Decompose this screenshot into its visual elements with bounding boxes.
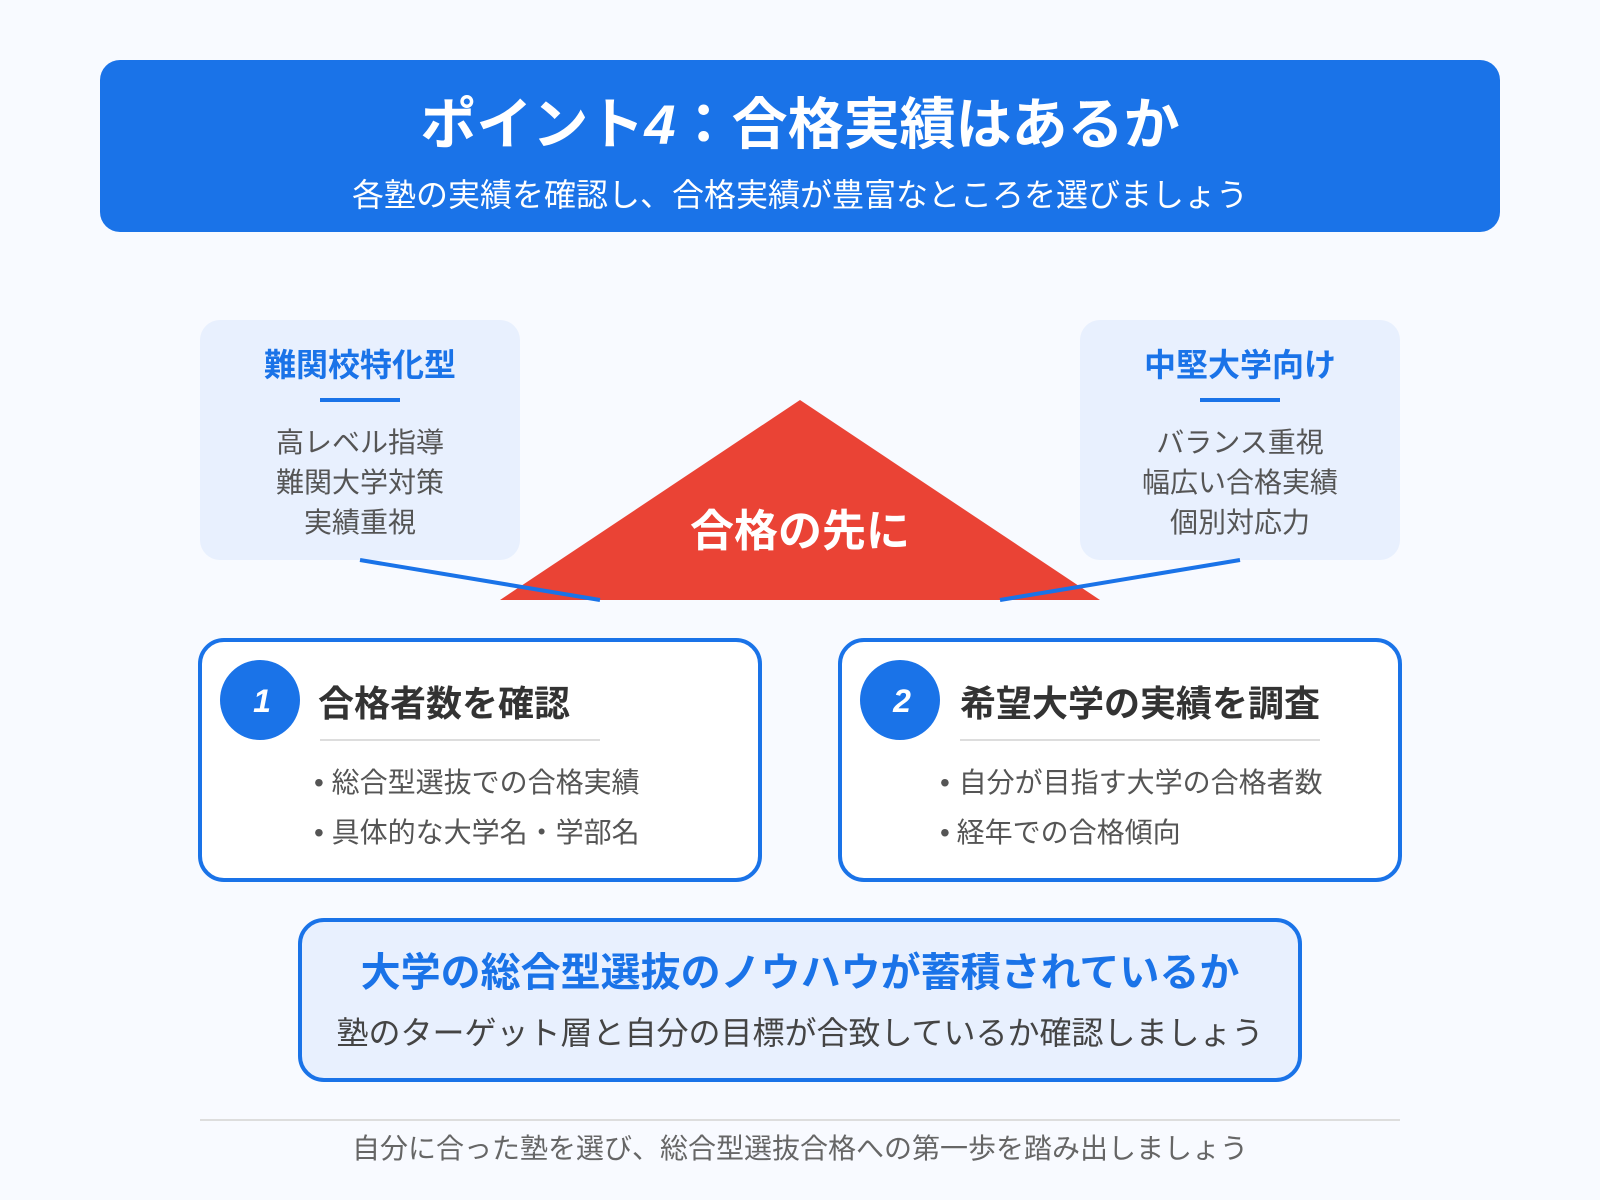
number badge 1 — [220, 660, 300, 740]
number badge 2: 2 — [892, 683, 911, 719]
panel text: 難関大学対策 — [276, 467, 444, 498]
panel text: 個別対応力 — [1170, 507, 1310, 538]
card 1 bullets: • 具体的な大学名・学部名 — [314, 817, 640, 848]
card 1 bullets — [314, 767, 640, 848]
callout text: 塾のターゲット層と自分の目標が合致しているか確認しましょう — [336, 1015, 1264, 1051]
triangle: beyond passing: 合格の先に — [690, 507, 910, 556]
card 2 heading: 希望大学の実績を調査 — [960, 683, 1320, 724]
panel heading: 中堅大学向け — [1144, 347, 1336, 383]
panel: mid-level universities — [1080, 320, 1400, 560]
subtitle: 各塾の実績を確認し、合格実績が豊富なところを選びましょう — [352, 177, 1248, 213]
connector left — [360, 560, 600, 600]
panel text: 幅広い合格実績 — [1142, 467, 1338, 498]
card 2 bullets — [940, 767, 1323, 848]
card 2 bullets: • 経年での合格傾向 — [940, 817, 1181, 848]
card 1 heading: 合格者数を確認 — [318, 683, 570, 724]
number badge 2 — [860, 660, 940, 740]
connector right — [1000, 560, 1240, 600]
card 2 bullets: • 自分が目指す大学の合格者数 — [940, 767, 1323, 798]
number badge 1: 1 — [253, 683, 271, 719]
title: ポイント4：合格実績はあるか — [420, 93, 1180, 156]
callout — [300, 920, 1300, 1080]
callout heading: 大学の総合型選抜のノウハウが蓄積されているか — [361, 951, 1239, 995]
card 2 — [840, 640, 1400, 880]
panel heading: 難関校特化型 — [264, 347, 456, 383]
triangle: beyond passing — [500, 400, 1100, 600]
card 1 bullets: • 総合型選抜での合格実績 — [314, 767, 640, 798]
panel text: 実績重視 — [304, 507, 416, 538]
footer text: 自分に合った塾を選び、総合型選抜合格への第一歩を踏み出しましょう — [352, 1133, 1248, 1164]
panel text — [1142, 427, 1338, 538]
header banner — [100, 60, 1500, 232]
panel text: 高レベル指導 — [276, 427, 444, 458]
panel text: バランス重視 — [1156, 427, 1324, 458]
panel text — [276, 427, 444, 538]
card 1 — [200, 640, 760, 880]
panel: elite schools — [200, 320, 520, 560]
